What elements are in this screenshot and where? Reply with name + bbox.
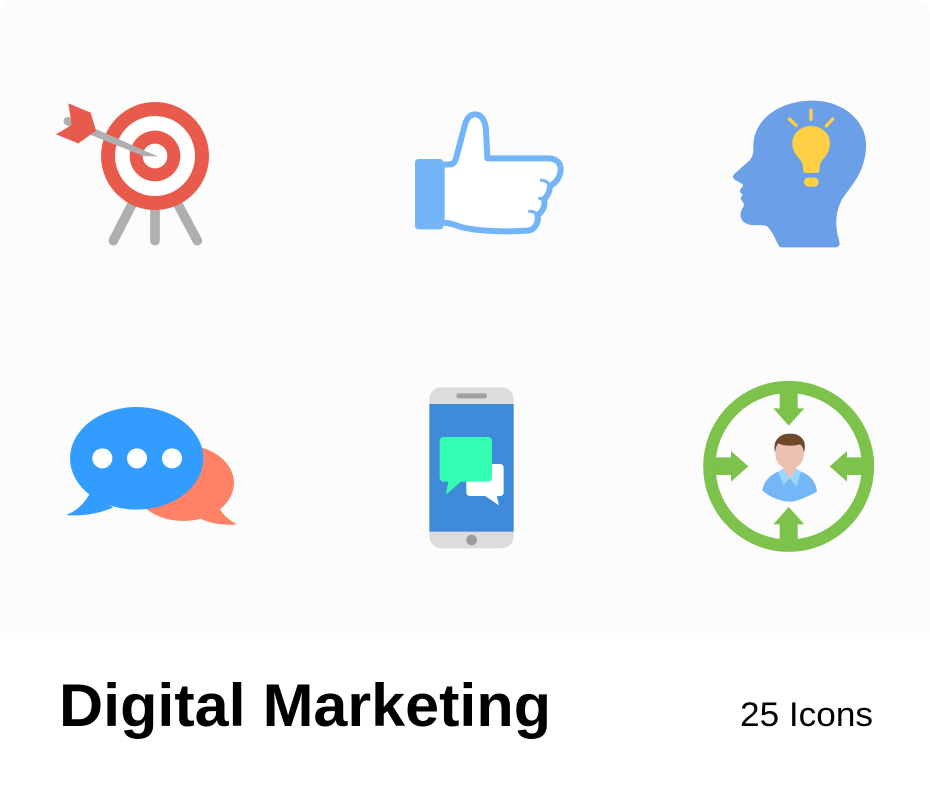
icon: thumbs up	[415, 114, 561, 231]
icon: smartphone with messages	[429, 387, 514, 548]
icon: chat bubbles	[66, 407, 237, 525]
icon: customer target	[709, 387, 868, 546]
icon: target with arrow	[56, 102, 209, 241]
icon: head with light bulb	[733, 101, 866, 247]
title: Digital Marketing	[59, 672, 551, 739]
icon count: 25 Icons	[740, 696, 873, 734]
